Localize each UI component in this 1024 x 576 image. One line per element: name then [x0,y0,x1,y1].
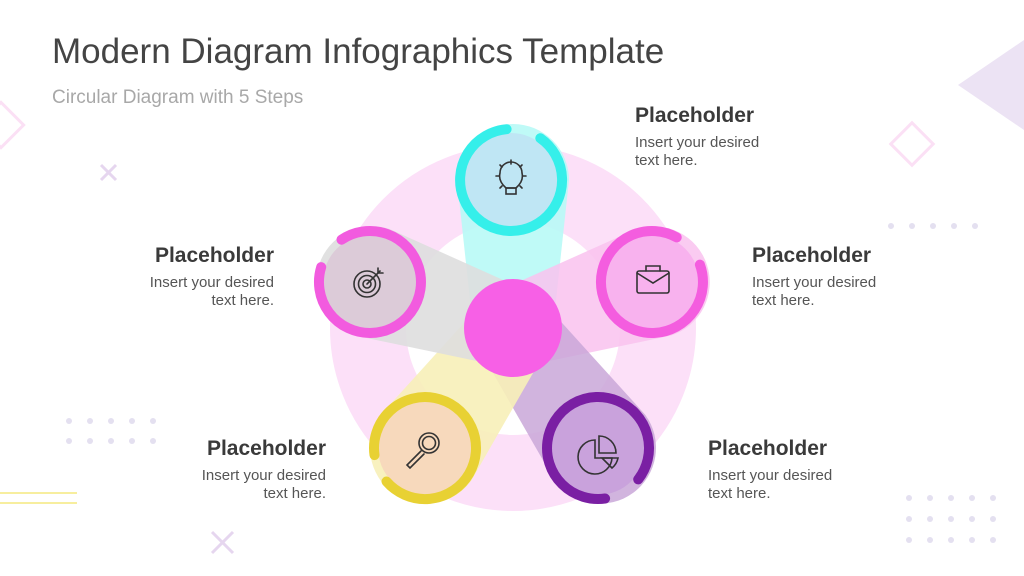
step rings [319,129,703,499]
center circle [464,279,562,377]
icon: pie chart [578,436,618,474]
text: bottom-left step: text here. [263,485,326,502]
text: right step: Placeholder [752,244,871,267]
subtitle: Circular Diagram with 5 Steps [52,87,303,108]
text: bottom-left step [202,437,326,502]
outer ring [368,183,658,473]
icon: bulb [496,160,526,194]
text: top step [635,104,759,169]
text: top step: Placeholder [635,104,754,127]
text: left step [150,244,274,309]
icon: briefcase [637,266,669,293]
text: bottom-right step [708,437,832,502]
text: top step: Insert your desired [635,134,759,151]
icon: magnifier [407,433,439,468]
title: Modern Diagram Infographics Template [52,32,664,71]
text: bottom-right step: Insert your desired [708,467,832,484]
text: left step: Placeholder [155,244,274,267]
text: right step: text here. [752,292,815,309]
icon: target [354,268,383,297]
petals [302,124,724,526]
text: bottom-right step: Placeholder [708,437,827,460]
text: bottom-right step: text here. [708,485,771,502]
text: left step: Insert your desired [150,274,274,291]
text: bottom-left step: Placeholder [207,437,326,460]
text: left step: text here. [211,292,274,309]
text: right step: Insert your desired [752,274,876,291]
text: bottom-left step: Insert your desired [202,467,326,484]
text: right step [752,244,876,309]
step circle fills [323,133,699,495]
icons [354,160,669,474]
text: top step: text here. [635,152,698,169]
